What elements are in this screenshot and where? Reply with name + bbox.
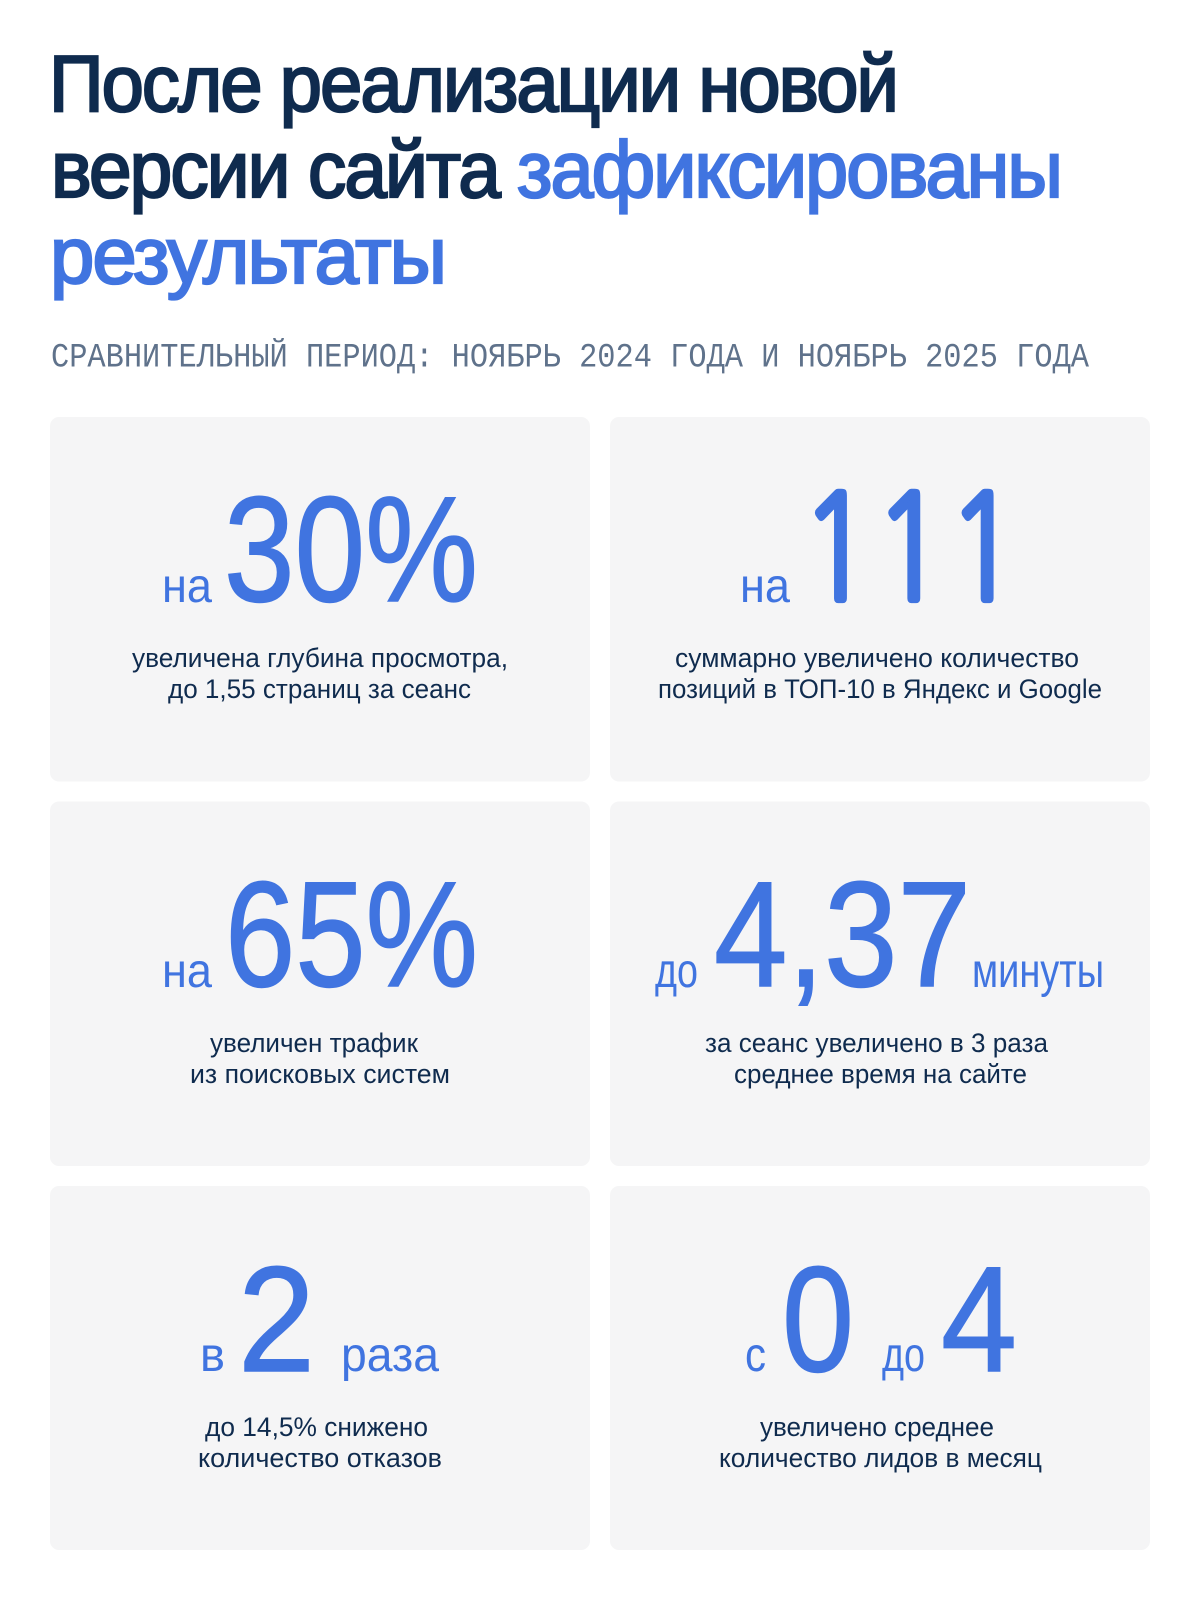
metric: на 65%: 65%	[225, 850, 478, 1018]
metric: на 111: на	[740, 560, 790, 613]
caption	[719, 1412, 1042, 1473]
metric: с 0 до 4	[745, 1235, 1017, 1403]
title: версии сайта	[51, 125, 501, 214]
caption	[132, 643, 508, 704]
caption	[658, 643, 1102, 704]
panel: 4,37 minutes	[610, 802, 1150, 1166]
caption: позиций в ТОП-10 в Яндекс и Google	[658, 674, 1102, 704]
caption	[190, 1028, 450, 1089]
metric: в 2 раза: раза	[341, 1329, 439, 1382]
caption	[705, 1028, 1049, 1089]
metric: на 111	[740, 476, 1020, 622]
caption	[198, 1412, 442, 1473]
metric: на 111: 111	[800, 476, 1020, 622]
caption: увеличено среднее	[760, 1412, 994, 1442]
metric: на 30%: на	[162, 560, 212, 613]
metric: в 2 раза: в	[200, 1329, 225, 1382]
metric: до 4,37 минуты	[655, 850, 1104, 1018]
metric: с 0 до 4: с	[745, 1329, 766, 1382]
metric: до 4,37 минуты: до	[655, 945, 698, 998]
metric: в 2 раза: 2	[238, 1235, 315, 1403]
caption: из поисковых систем	[190, 1059, 450, 1089]
panel: 0 to 4 leads	[610, 1186, 1150, 1550]
caption: увеличена глубина просмотра,	[132, 643, 508, 673]
metric: на 65%	[162, 850, 478, 1018]
caption: увеличен трафик	[210, 1028, 418, 1058]
metric: на 65%: на	[162, 945, 212, 998]
title: После реализации новой	[49, 39, 897, 128]
caption: за сеанс увеличено в 3 раза	[705, 1028, 1049, 1058]
metric: до 4,37 минуты: минуты	[972, 945, 1104, 998]
caption: среднее время на сайте	[734, 1059, 1027, 1089]
panel: 2x bounce	[50, 1186, 590, 1550]
panel: 30% depth	[50, 417, 590, 782]
panel: 65% traffic	[50, 802, 590, 1166]
title	[49, 39, 1061, 300]
metric: с 0 до 4: до	[882, 1329, 925, 1382]
metric: с 0 до 4: 4	[941, 1235, 1017, 1403]
caption: суммарно увеличено количество	[675, 643, 1079, 673]
metric: на 30%: 30%	[224, 465, 478, 633]
caption: до 14,5% снижено	[205, 1412, 428, 1442]
panel: 111 positions	[610, 417, 1150, 782]
metric: в 2 раза	[200, 1235, 439, 1403]
title: зафиксированы	[517, 125, 1061, 214]
title: результаты	[50, 211, 445, 300]
caption: количество отказов	[198, 1443, 442, 1473]
subtitle: comparison period: СРАВНИТЕЛЬНЫЙ ПЕРИОД: НОЯБРЬ 2024 ГОДА И НОЯБРЬ 2025 ГОДА	[51, 338, 1090, 378]
metric: с 0 до 4: 0	[782, 1235, 854, 1403]
metric: до 4,37 минуты: 4,37	[714, 850, 971, 1018]
caption: количество лидов в месяц	[719, 1443, 1042, 1473]
caption: до 1,55 страниц за сеанс	[168, 674, 471, 704]
